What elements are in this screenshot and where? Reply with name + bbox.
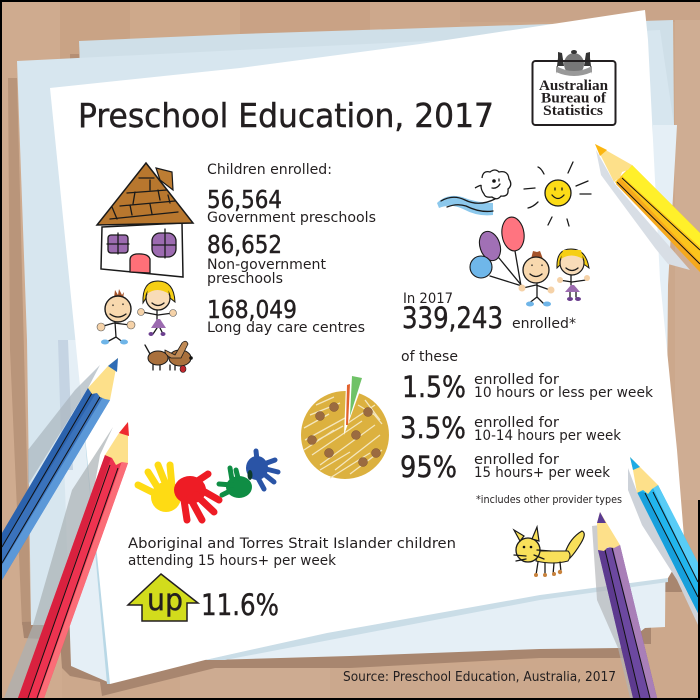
stat: non-government preschools: preschools xyxy=(207,271,283,287)
stat: government preschools: 56,564 xyxy=(207,185,282,214)
stat: 1.5 percent: enrolled for xyxy=(474,372,559,388)
stat: 95 percent: enrolled for xyxy=(474,452,559,468)
arrow: up: up xyxy=(147,583,183,618)
icon: girl drawing xyxy=(138,281,176,336)
stat: 1.5 percent: 1.5% xyxy=(402,370,466,404)
logo: Australian Bureau of Statistics xyxy=(532,50,616,125)
text block: total enrolled: enrolled* xyxy=(512,316,576,332)
text block: Aboriginal and Torres Strait Islander children: attending 15 hours+ per week xyxy=(128,553,337,569)
stat: 3.5 percent: 3.5% xyxy=(400,411,466,445)
stat: government preschools: Government preschools xyxy=(207,210,376,226)
stat: 3.5 percent xyxy=(400,411,622,445)
stat: 95 percent xyxy=(400,450,611,484)
source line: Source: Preschool Education, Australia, 2017 xyxy=(343,670,616,685)
text block: total enrolled xyxy=(402,291,576,335)
title: Preschool Education, 2017 xyxy=(78,96,494,135)
bottom edge strip of white paper xyxy=(205,575,668,660)
icon: coat of arms crest xyxy=(556,50,592,75)
back paper sheet xyxy=(79,20,674,300)
stat: non-government preschools: 86,652 xyxy=(207,230,282,259)
icon: wind wave xyxy=(437,196,495,215)
light blue paper sheet xyxy=(17,30,674,625)
stat: 3.5 percent: enrolled for xyxy=(474,415,559,431)
pencil: blue xyxy=(2,358,118,580)
logo: Australian Bureau of Statistics: Statistics xyxy=(543,103,603,119)
shadow under papers xyxy=(22,620,650,696)
pencil: cyan xyxy=(628,457,698,625)
text block: children enrolled by provider xyxy=(207,162,376,336)
icon: green hand xyxy=(219,468,252,498)
pencil: yellow xyxy=(595,144,700,272)
stat: long day care centres xyxy=(207,295,365,336)
stat: long day care centres: 168,049 xyxy=(207,295,297,324)
footnote: *includes other provider types xyxy=(476,493,622,506)
icon: cloud xyxy=(475,170,511,199)
paper fold stripe xyxy=(58,340,73,470)
icon: house drawing xyxy=(97,163,193,277)
stat: 3.5 percent: 10-14 hours per week xyxy=(474,428,622,444)
text block: Aboriginal and Torres Strait Islander children xyxy=(128,536,456,569)
stat: non-government preschools xyxy=(207,230,327,287)
pie chart: cookie xyxy=(301,376,389,479)
pencil: red xyxy=(4,422,129,698)
stat: 11.6 percent: 11.6% xyxy=(201,588,279,622)
lower pale paper sheet xyxy=(150,125,677,660)
text block: total enrolled: In 2017 xyxy=(403,291,453,307)
icon: blue hand xyxy=(246,451,278,489)
stat: long day care centres: Long day care centres xyxy=(207,320,365,336)
stat: 1.5 percent xyxy=(402,370,654,404)
text block: of these: of these xyxy=(401,349,458,365)
pencil: purple xyxy=(592,512,657,698)
icon: yellow hand xyxy=(138,465,181,512)
icon: dog drawing xyxy=(145,341,193,372)
stat: non-government preschools: Non-government xyxy=(207,257,327,273)
text block: total enrolled: 339,243 xyxy=(402,301,503,335)
icon: balloons xyxy=(470,216,526,286)
icon: girl with balloons xyxy=(557,249,590,301)
text block: Aboriginal and Torres Strait Islander children: Aboriginal and Torres Strait Islander children xyxy=(128,536,456,552)
stat: 95 percent: 15 hours+ per week xyxy=(474,465,611,481)
icon: cat xyxy=(514,527,584,577)
stat: 95 percent: 95% xyxy=(400,450,457,484)
label: children enrolled: Children enrolled: xyxy=(207,162,332,178)
icon: boy with balloons xyxy=(518,251,554,306)
arrow: up xyxy=(128,574,198,621)
logo: Australian Bureau of Statistics: Australian xyxy=(539,78,609,94)
icon: sun xyxy=(524,162,591,226)
stat: government preschools xyxy=(207,185,376,226)
icon: boy drawing xyxy=(97,289,135,344)
stat: 1.5 percent: 10 hours or less per week xyxy=(474,385,654,401)
logo: Australian Bureau of Statistics: Bureau of xyxy=(541,90,607,106)
icon: red hand xyxy=(174,474,219,520)
